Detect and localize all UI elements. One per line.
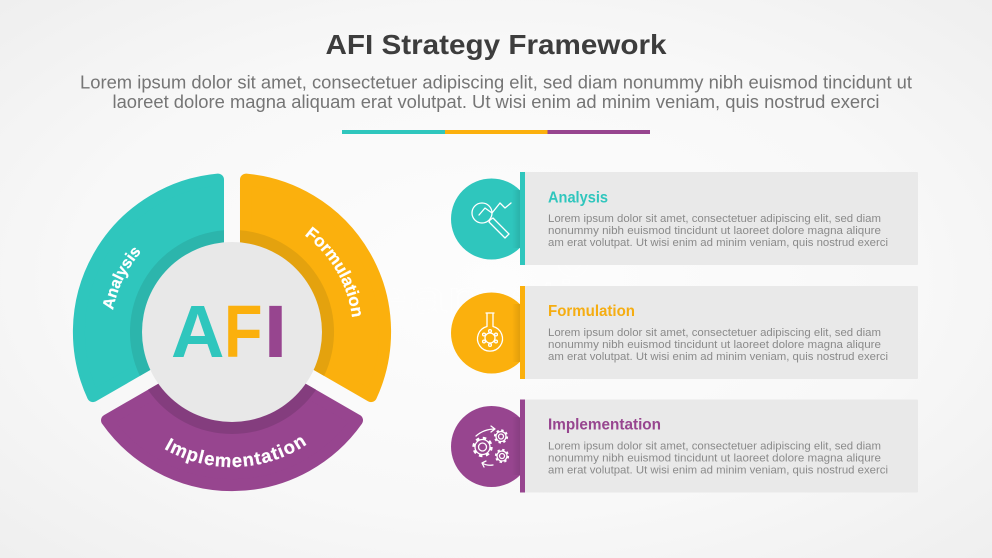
subtitle text: Lorem ipsum dolor sit amet, consectetuer adipiscing elit, sed diam nonummy nibh euismod tincidunt ut — [80, 72, 912, 92]
segment: Analysis: Analysis — [103, 248, 140, 310]
centre label AFI: I — [264, 290, 288, 373]
body text: Lorem ipsum dolor sit amet, consectetuer adipiscing elit, sed diam — [548, 440, 881, 452]
subtitle text: laoreet dolore magna aliquam erat volutpat. Ut wisi enim ad minim veniam, quis nostrud exerci — [112, 92, 880, 112]
centre label AFI: F — [224, 290, 262, 373]
heading: Analysis — [548, 190, 608, 206]
icon: formulation badge — [451, 292, 532, 374]
segment: Implementation: Implementation — [164, 437, 306, 468]
text box — [524, 286, 918, 379]
body text: am erat volutpat. Ut wisi enim ad minim veniam, quis nostrud exerci — [548, 351, 888, 363]
segment: Formulation — [240, 174, 392, 402]
body text: nonummy nibh euismod tincidunt ut laoreet dolore magna aliqure — [548, 452, 881, 464]
accent bar — [520, 286, 525, 379]
accent bar — [520, 172, 525, 265]
accent bar — [520, 400, 525, 492]
body text: nonummy nibh euismod tincidunt ut laoreet dolore magna aliqure — [548, 225, 881, 237]
segment: Formulation: Formulation — [305, 226, 361, 317]
icon: implementation badge — [451, 406, 532, 487]
segment: Implementation — [101, 384, 363, 492]
text box — [524, 400, 918, 492]
body text — [548, 327, 888, 363]
panel: Formulation — [451, 286, 918, 379]
text box — [524, 172, 918, 265]
heading: Implementation — [548, 416, 661, 434]
body text: am erat volutpat. Ut wisi enim ad minim veniam, quis nostrud exerci — [548, 237, 888, 249]
subtitle text — [80, 72, 912, 112]
heading: Formulation — [548, 303, 635, 320]
icon: analysis badge — [451, 178, 532, 260]
circular AFI diagram — [72, 174, 392, 492]
centre label AFI: A — [171, 290, 224, 373]
panel: Analysis — [451, 172, 918, 265]
body text — [548, 440, 888, 476]
panel: Implementation — [451, 400, 918, 492]
watermark — [308, 247, 683, 323]
centre label AFI — [171, 290, 288, 373]
body text: Lorem ipsum dolor sit amet, consectetuer adipiscing elit, sed diam — [548, 327, 881, 339]
body text: am erat volutpat. Ut wisi enim ad minim veniam, quis nostrud exerci — [548, 464, 888, 476]
centre circle — [142, 242, 322, 422]
watermark: dreamstime — [308, 271, 670, 323]
body text: Lorem ipsum dolor sit amet, consectetuer adipiscing elit, sed diam — [548, 213, 881, 225]
body text — [548, 213, 888, 249]
tri-colour title underline — [342, 130, 650, 134]
segment: Analysis — [72, 174, 224, 402]
body text: nonummy nibh euismod tincidunt ut laoreet dolore magna aliqure — [548, 339, 881, 351]
title: AFI Strategy Framework — [326, 29, 667, 60]
